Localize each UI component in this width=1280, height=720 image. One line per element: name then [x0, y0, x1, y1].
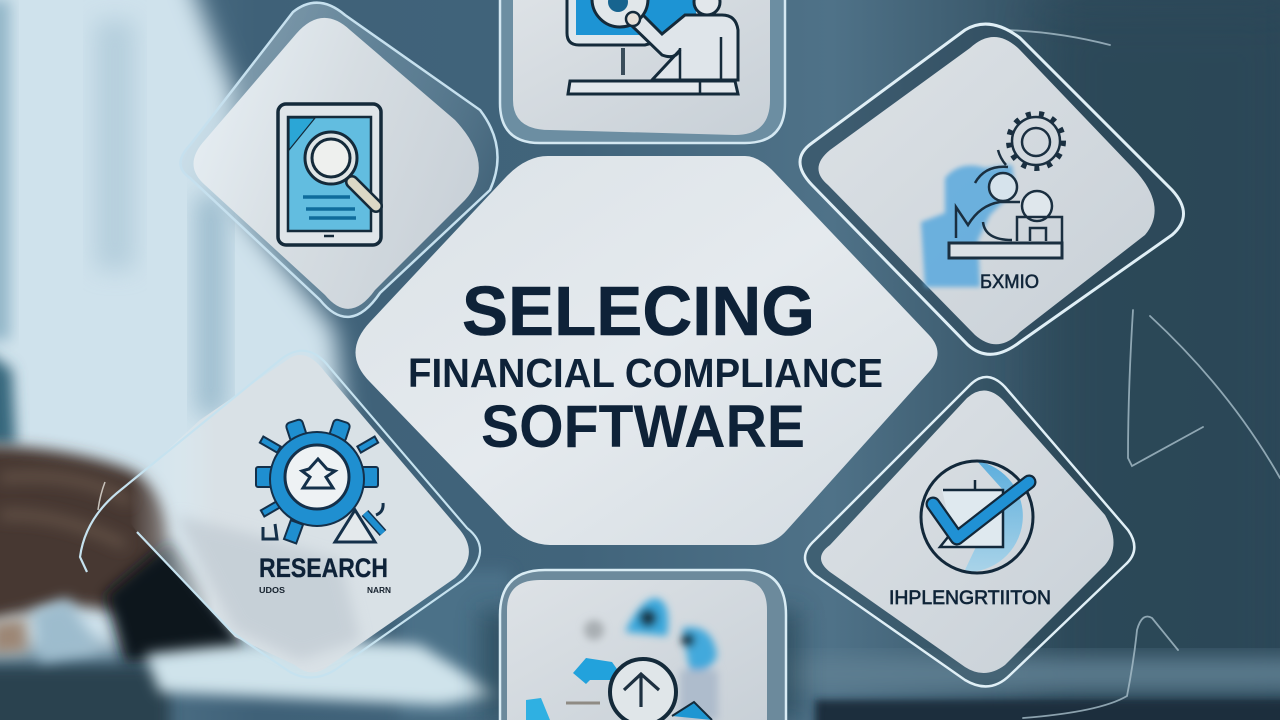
- panel: lower-left research gear: [80, 351, 480, 678]
- title: selecing: SELECING: [462, 272, 815, 350]
- icon: blue gear with triangle: [256, 419, 391, 595]
- panel: bottom-center search: [500, 570, 786, 720]
- caption: research small print right: NARN: [367, 586, 391, 595]
- title: software: SOFTWARE: [481, 393, 805, 460]
- icon: check mark badge: [889, 461, 1051, 609]
- caption: research small print left: UDOS: [259, 586, 286, 595]
- title: financial compliance: FINANCIAL COMPLIANCE: [408, 350, 883, 396]
- label: team panel: БXMIO: [980, 272, 1039, 293]
- icon: team with gear: [921, 114, 1063, 293]
- label: research: RESEARCH: [259, 553, 388, 583]
- panel: center title hexagon: [356, 156, 938, 545]
- sketched accent lines: [1007, 30, 1280, 718]
- label: implementation: IHPLENGRTIITON: [889, 588, 1051, 609]
- panel: top-left research tablet: [180, 3, 498, 317]
- icon: tablet with magnifier: [278, 104, 381, 245]
- icon: person at monitor: [567, 0, 738, 94]
- panel: upper-right team and gear: [800, 24, 1184, 354]
- panel: lower-right implementation: [805, 377, 1134, 686]
- icon: puzzle magnifier: [526, 598, 718, 720]
- panel: top-center consultation: [500, 0, 785, 143]
